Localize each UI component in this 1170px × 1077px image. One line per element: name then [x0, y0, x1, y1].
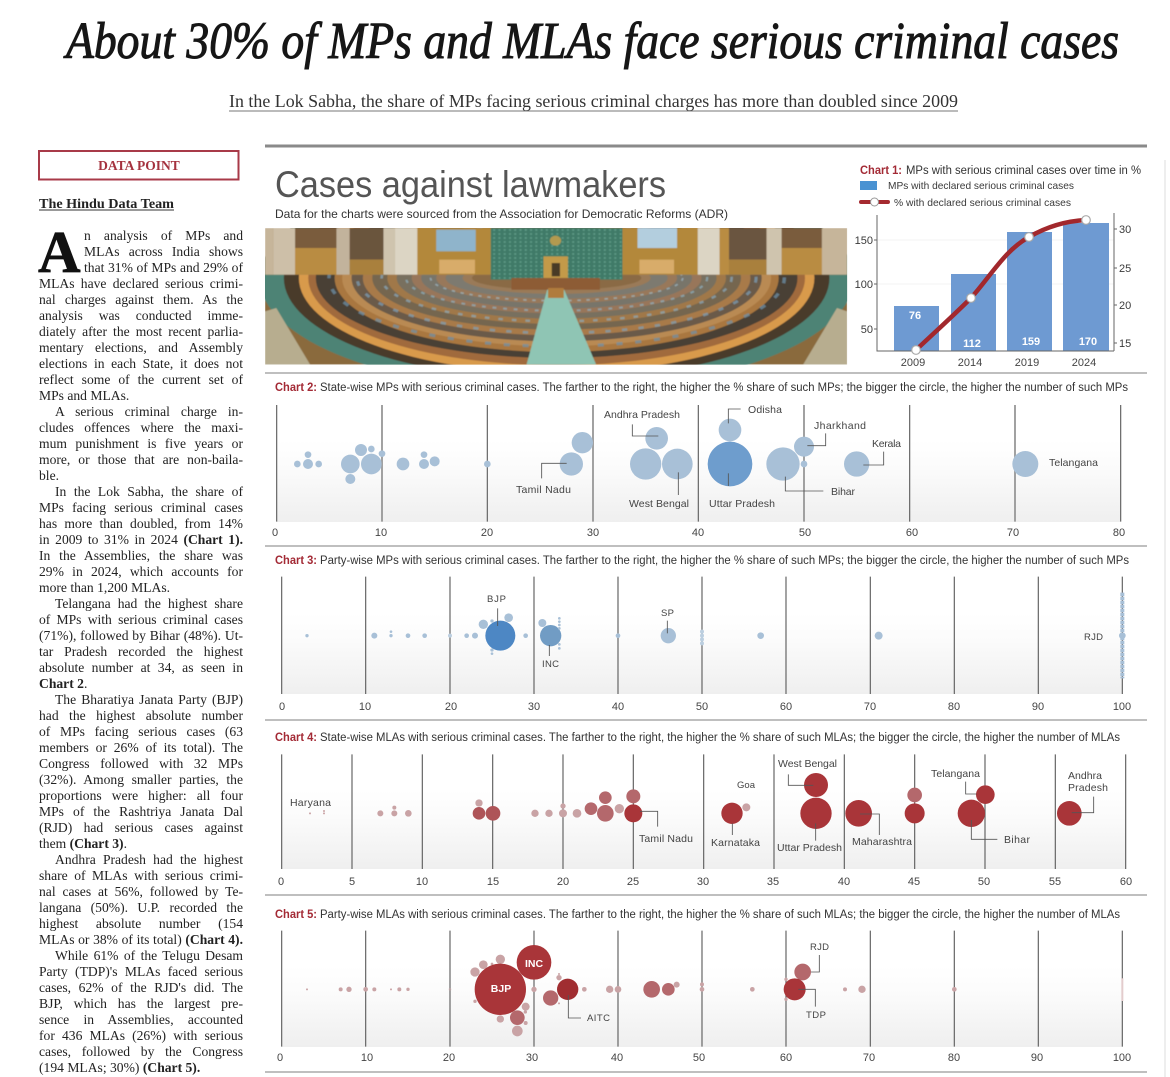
chart 2 axis labels: 20: [481, 527, 493, 539]
chart 4 axis labels: 30: [697, 876, 709, 888]
chart 2 callouts: Tamil Nadu: [516, 484, 571, 496]
article text: Andhra Pradesh had the highest: [55, 852, 243, 867]
chart 4 axis labels: 45: [908, 876, 920, 888]
chart 2 callouts: Bihar: [831, 486, 856, 498]
panel heading: Cases against lawmakers: [275, 164, 666, 205]
chart 2 callouts: Odisha: [748, 404, 782, 416]
bar and line chart: 2024: [1072, 357, 1096, 369]
bubble plot: [282, 931, 1122, 1047]
chart 1 panel: [855, 165, 1141, 369]
chart 3 axis labels: 90: [1032, 701, 1044, 713]
data point tag: DATA POINT: [98, 158, 180, 173]
article text: share of MLAs with serious crimi-: [39, 868, 243, 883]
chart 4 axis labels: 40: [838, 876, 850, 888]
bar and line chart: 100: [855, 279, 873, 291]
chart 2 axis labels: 80: [1113, 527, 1125, 539]
chart 4 axis labels: 25: [627, 876, 639, 888]
chart 4 heading: State-wise MLAs with serious criminal cases. The farther to the right, the higher the % share of such MLAs; the bigger the circle, the higher the number of MLAs: [320, 732, 1120, 744]
chart 5 axis labels: 70: [863, 1052, 875, 1064]
article text: A serious criminal charge in-: [55, 404, 243, 419]
chart 4 axis labels: 55: [1049, 876, 1061, 888]
chart 2 axis labels: 40: [692, 527, 704, 539]
chart 5 callouts: BJP: [491, 983, 511, 995]
chart 3 axis labels: 40: [612, 701, 624, 713]
bar and line chart: 112: [963, 338, 981, 350]
chart 4 callouts: Bihar: [1004, 834, 1030, 846]
chart 2 callouts: Andhra Pradesh: [604, 409, 680, 421]
RJD column of dots: [1119, 593, 1126, 678]
article text: cases, 62% of the RJD's did. The: [39, 980, 243, 995]
chart 3 callouts: RJD: [1084, 632, 1103, 643]
chart 2 callouts: [516, 404, 1098, 510]
chart 4 callouts: Goa: [737, 780, 756, 791]
article text: ble.: [39, 468, 59, 483]
article text: proportions were higher: all four: [39, 788, 243, 803]
article text: BJP, which has the largest pre-: [39, 996, 243, 1011]
article text: 29% in 2024, which accounts for: [39, 564, 243, 579]
chart 2 axis labels: 60: [906, 527, 918, 539]
chart 4 callouts: Karnataka: [711, 837, 760, 849]
chart 5 axis labels: 60: [780, 1052, 792, 1064]
chart 3 axis labels: 20: [445, 701, 457, 713]
chart 3 axis labels: [279, 701, 1131, 713]
article text: Party (TDP)'s MLAs faced serious: [39, 964, 243, 979]
chart 5 callouts: [491, 942, 829, 1024]
article text: langana (50%). U.P. recorded the: [39, 900, 243, 915]
chart 5 callouts: INC: [525, 958, 543, 970]
article text: MPs facing serious criminal cases: [39, 500, 243, 515]
panel: chart 3: [275, 555, 1131, 713]
chart 4 axis labels: 50: [978, 876, 990, 888]
chart 5 axis labels: 0: [277, 1052, 283, 1064]
article text: (32%). Among smaller parties, the: [39, 772, 243, 787]
chart 3 axis labels: 10: [359, 701, 371, 713]
bar and line chart: 25: [1119, 263, 1131, 275]
article text: tar Pradesh recorded the highest: [39, 644, 243, 659]
chart 2 axis labels: 70: [1007, 527, 1019, 539]
article text: Congress followed with 32 MPs: [39, 756, 243, 771]
chart 5 axis labels: [277, 1052, 1131, 1064]
bar and line chart: 170: [1079, 336, 1097, 348]
chart 2 callouts: Telangana: [1049, 457, 1098, 469]
article text: nal charges against them. As the: [39, 292, 243, 307]
bar and line chart: 2014: [958, 357, 982, 369]
article text: (71%), followed by Bihar (48%). Ut-: [39, 628, 243, 643]
chart 4 callouts: Tamil Nadu: [639, 833, 693, 845]
chart 5 axis labels: 50: [693, 1052, 705, 1064]
aisle: [527, 290, 596, 365]
bubble plot: [282, 754, 704, 869]
article text: MLAs or 38% of its total) (Chart 4).: [39, 932, 243, 947]
article text: The Bharatiya Janata Party (BJP): [55, 692, 243, 707]
chart 4 callouts: Uttar Pradesh: [777, 842, 842, 854]
article text: that 31% of MPs and 29% of: [84, 260, 243, 275]
article text: While 61% of the Telugu Desam: [55, 948, 243, 963]
photo: parliament chamber: [265, 228, 848, 365]
chart 3 callouts: BJP: [487, 594, 506, 605]
chart 2 axis labels: 10: [375, 527, 387, 539]
article text: more, or those that are non-baila-: [39, 452, 243, 467]
chart 4 axis labels: 20: [557, 876, 569, 888]
chart 2 heading: Chart 2:: [275, 382, 317, 394]
chart 5 axis labels: 40: [611, 1052, 623, 1064]
article text: (194 MLAs; 30%) (Chart 5).: [39, 1060, 200, 1075]
chart 4 callouts: West Bengal: [778, 758, 837, 770]
article text: analysis was conducted imme-: [39, 308, 243, 323]
panel: chart 2: [272, 382, 1128, 539]
article text: in 2009 to 31% in 2024 (Chart 1).: [39, 532, 243, 547]
chart 5 axis labels: 10: [361, 1052, 373, 1064]
chart 3 axis labels: 30: [528, 701, 540, 713]
article text: mum punishment is five years or: [39, 436, 243, 451]
article text: [38, 219, 244, 1075]
chart 2 callouts: Uttar Pradesh: [709, 498, 775, 510]
byline: The Hindu Data Team: [39, 196, 175, 211]
chart 3 axis labels: 80: [948, 701, 960, 713]
chart 5 heading: Party-wise MLAs with serious criminal cases. The farther to the right, the higher the % share of such MLAs; the bigger the circle, the higher the number of MLAs: [320, 909, 1120, 921]
article text: n analysis of MPs and: [84, 228, 243, 243]
subtitle: In the Lok Sabha, the share of MPs facing serious criminal charges has more than doubled since 2009: [229, 91, 958, 111]
bar and line chart: 159: [1022, 336, 1040, 348]
panel: chart 5: [275, 909, 1131, 1064]
chart 5 axis labels: 100: [1113, 1052, 1131, 1064]
chart 2 callouts: Kerala: [872, 438, 901, 450]
drop cap: A: [38, 219, 81, 285]
bar and line chart: 50: [861, 324, 873, 336]
chart 2 callouts: Jharkhand: [814, 420, 866, 432]
chart 4 axis labels: 5: [349, 876, 355, 888]
wall: [272, 274, 782, 275]
chart 3 callouts: INC: [542, 659, 559, 670]
chart 3 axis labels: 100: [1113, 701, 1131, 713]
article text: Telangana had the highest share: [55, 596, 243, 611]
chart 3 axis labels: 70: [864, 701, 876, 713]
bar and line chart: 30: [1119, 224, 1131, 236]
bar and line chart: 76: [909, 310, 921, 322]
article text: nal cases at 56%, followed by Te-: [39, 884, 243, 899]
chart 4 axis labels: 15: [487, 876, 499, 888]
legend: bars: MPs with declared serious criminal cases: [888, 180, 1074, 192]
chart 4 callouts: Pradesh: [1068, 782, 1108, 794]
source note: Data for the charts were sourced from the Association for Democratic Reforms (ADR): [275, 207, 728, 221]
chart 2 axis labels: 50: [799, 527, 811, 539]
data point tag: [39, 151, 238, 180]
bar and line chart: 2009: [901, 357, 925, 369]
chart 5 heading: Chart 5:: [275, 909, 317, 921]
article text: had the highest absolute number: [39, 708, 243, 723]
chart 5 axis labels: 90: [1031, 1052, 1043, 1064]
chart 5 axis labels: 20: [443, 1052, 455, 1064]
chart 4 axis labels: 60: [1120, 876, 1132, 888]
article text: MLAs across India shows: [84, 244, 243, 259]
article text: elections in each State, it does not: [39, 356, 243, 371]
bubble plot: [282, 577, 1122, 694]
article text: cases, followed by the Congress: [39, 1044, 243, 1059]
chart 2 callouts: West Bengal: [629, 498, 689, 510]
article text: diately after the most recent parlia-: [39, 324, 243, 339]
bar and line chart: 150: [855, 235, 873, 247]
chart 2 heading: State-wise MPs with serious criminal cases. The farther to the right, the higher the % share of such MPs; the bigger the circle, the higher the number of such MPs: [320, 382, 1128, 394]
article text: sence in Assemblies, accounted: [39, 1012, 243, 1027]
article text: cludes offences where the maxi-: [39, 420, 243, 435]
chart 5 axis labels: 80: [948, 1052, 960, 1064]
chart 4 axis labels: [278, 876, 1132, 888]
article text: them (Chart 3).: [39, 836, 127, 851]
bar and line chart: 2019: [1015, 357, 1039, 369]
article text: members or 26% of its total). The: [39, 740, 243, 755]
article text: MLAs have declared serious crimi-: [39, 276, 243, 291]
chart 3 heading: Chart 3:: [275, 555, 317, 567]
article text: for 436 MLAs (26%) with serious: [39, 1028, 243, 1043]
bubble plot right: [708, 405, 1121, 522]
chart 3 callouts: [487, 594, 1103, 670]
chart 4 callouts: Andhra: [1068, 770, 1102, 782]
chart 4 callouts: Haryana: [290, 797, 331, 809]
article text: of MPs facing serious cases (63: [39, 724, 243, 739]
chart 5 callouts: TDP: [806, 1010, 826, 1021]
bar and line chart: [855, 213, 1131, 369]
chart 3 heading: Party-wise MPs with serious criminal cases. The farther to the right, the higher the % share of such MPs; the bigger the circle, the higher the number of such MPs: [320, 555, 1129, 567]
article text: (RJD) had serious cases against: [39, 820, 243, 835]
article text: more than 1,200 MLAs.: [39, 580, 170, 595]
bubble plot right: [750, 955, 1123, 1007]
chart 4 heading: Chart 4:: [275, 732, 317, 744]
chart 3 axis labels: 0: [279, 701, 285, 713]
chart 4 callouts: [290, 758, 1108, 854]
chart 4 callouts: Maharashtra: [852, 836, 912, 848]
article text: reflect some of the current set of: [39, 372, 243, 387]
article text: In the Lok Sabha, the share of: [55, 484, 243, 499]
chart 5 callouts: AITC: [587, 1013, 610, 1024]
legend: line: % with declared serious criminal cases: [894, 197, 1071, 209]
chart 4 axis labels: 0: [278, 876, 284, 888]
bubble plot right: [721, 754, 1126, 869]
chart 1 heading: MPs with serious criminal cases over time in %: [906, 165, 1141, 177]
panel: chart 4: [275, 732, 1132, 888]
chart 1 heading: Chart 1:: [860, 165, 902, 177]
article text: has more than doubled, from 14%: [39, 516, 243, 531]
bar and line chart: 15: [1119, 338, 1131, 350]
chart 5 axis labels: 30: [526, 1052, 538, 1064]
chart 2 axis labels: 30: [587, 527, 599, 539]
article text: of MPs with serious criminal cases: [39, 612, 243, 627]
article text: MPs of the Rashtriya Janata Dal: [39, 804, 243, 819]
chart 5 callouts: RJD: [810, 942, 829, 953]
chart 2 axis labels: 0: [272, 527, 278, 539]
chart 3 callouts: SP: [661, 608, 674, 619]
chart 3 axis labels: 50: [696, 701, 708, 713]
bar and line chart: 20: [1119, 300, 1131, 312]
chart 3 axis labels: 60: [780, 701, 792, 713]
chart 4 axis labels: 35: [767, 876, 779, 888]
article text: In the Assemblies, the share was: [39, 548, 243, 563]
article text: highest absolute number (154: [39, 916, 243, 931]
article text: Chart 2.: [39, 676, 87, 691]
chart 4 axis labels: 10: [416, 876, 428, 888]
article text: MPs and MLAs.: [39, 388, 129, 403]
chart 4 callouts: Telangana: [931, 768, 980, 780]
article text: absolute number at 34, as seen in: [39, 660, 243, 675]
article text: mentary elections, and Assembly: [39, 340, 243, 355]
bubble plot: [277, 405, 698, 522]
chart 2 axis labels: [272, 527, 1125, 539]
